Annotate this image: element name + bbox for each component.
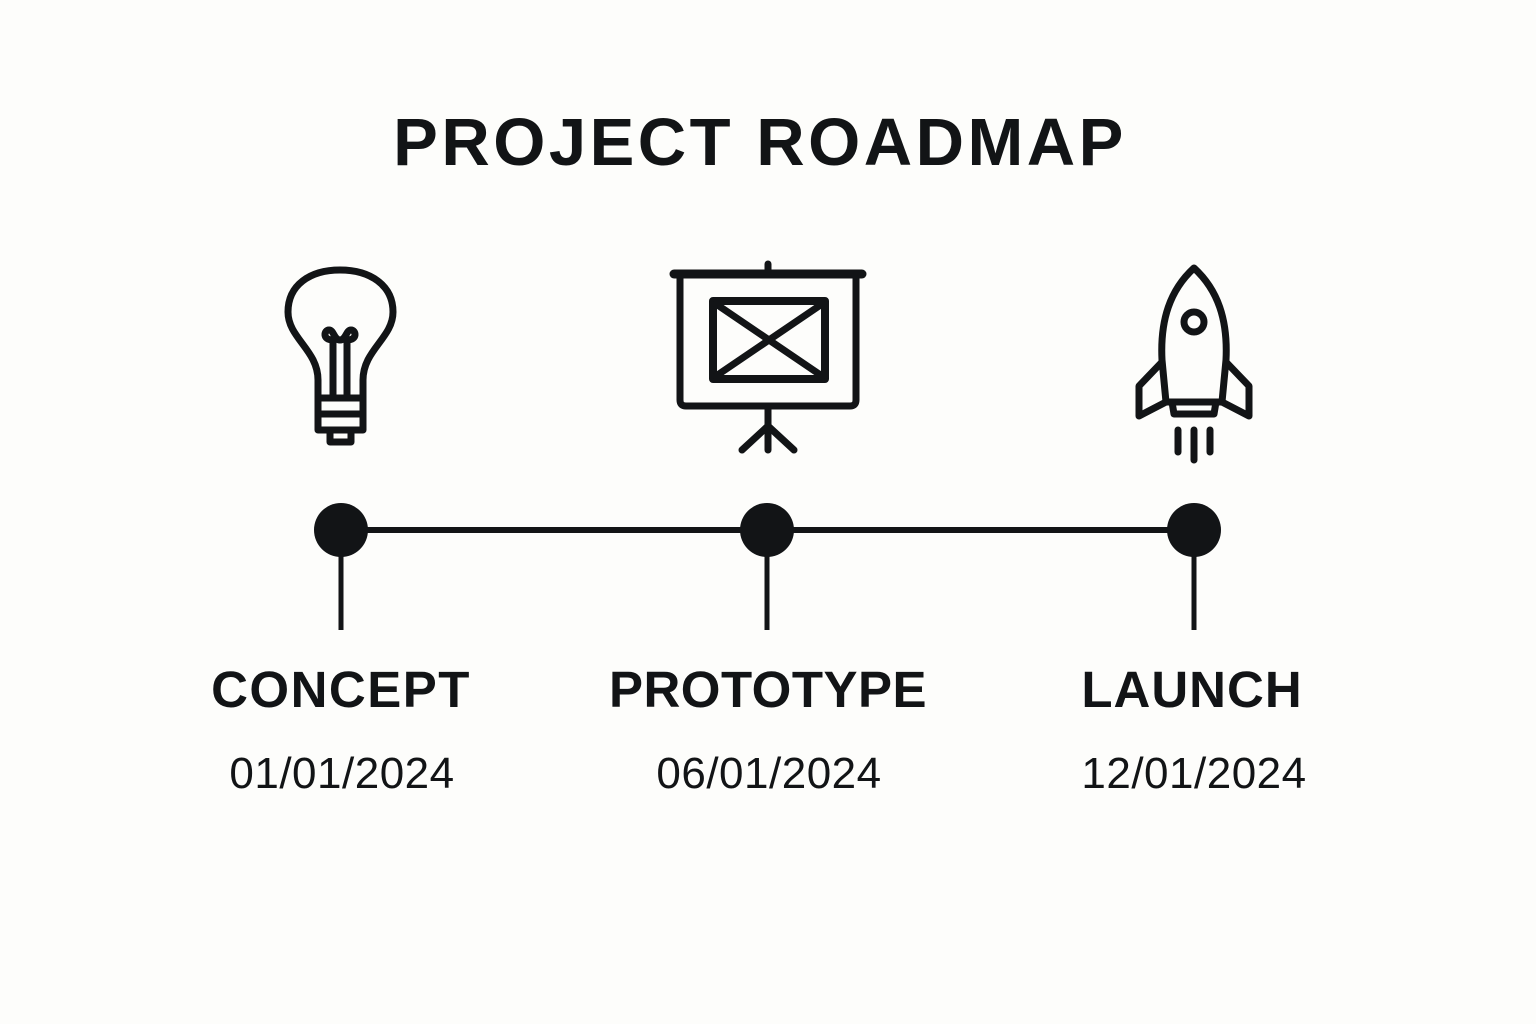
- timeline: [314, 503, 1221, 630]
- milestone: prototype: 06/01/2024: [656, 749, 882, 798]
- icon: presentation board: [674, 264, 862, 450]
- title: PROJECT ROADMAP: [393, 105, 1127, 180]
- milestone: concept: [211, 661, 471, 798]
- milestone: launch: 12/01/2024: [1081, 749, 1307, 798]
- icon: rocket: [1139, 268, 1249, 460]
- milestone: concept: CONCEPT: [211, 661, 471, 718]
- milestone: prototype: [609, 661, 927, 798]
- icon: light bulb: [288, 270, 393, 442]
- milestone: launch: LAUNCH: [1081, 661, 1303, 718]
- milestone: concept: 01/01/2024: [229, 749, 455, 798]
- milestone: launch: [1081, 661, 1307, 798]
- milestone: prototype: PROTOTYPE: [609, 661, 927, 718]
